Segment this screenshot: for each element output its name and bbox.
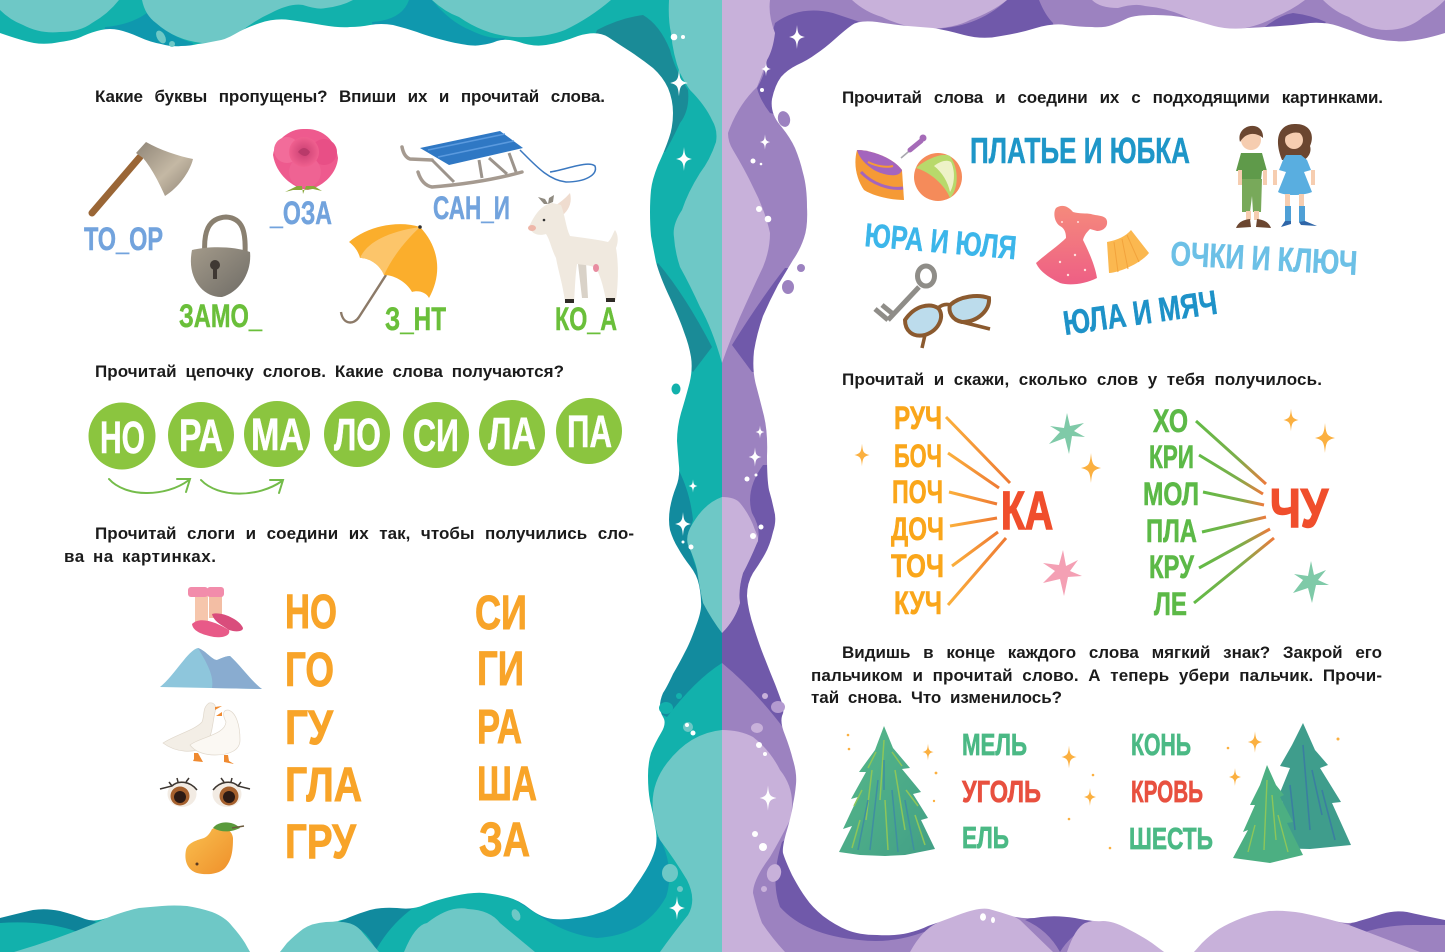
icon: glasses [905, 296, 990, 348]
word fan: чу: КРУ [1149, 549, 1195, 585]
word fan: ка: ДОЧ [891, 511, 944, 547]
icon: fir tree left [839, 726, 935, 856]
heading: what letters are missing: Какие буквы пропущены? Впиши их и прочитай слова. [95, 87, 605, 106]
heading: join syllables: ва на картинках. [64, 547, 216, 566]
icon: axe [92, 142, 193, 213]
word fan: чу: ПЛА [1146, 513, 1197, 549]
decorative sparkles around words [847, 731, 1340, 849]
syllables column 2: ЗА [479, 814, 530, 867]
icon: spinning top [855, 134, 926, 200]
icon: goat [528, 193, 618, 303]
word fan: чу: МОЛ [1143, 476, 1199, 512]
syllables column 2: РА [477, 701, 522, 754]
icon: mountains [160, 648, 262, 689]
word fan: ка: ТОЧ [891, 548, 944, 584]
icon: geese [163, 703, 240, 764]
label: axe word: ТО_ОР [84, 221, 163, 257]
words column: конь кровь шесть: ШЕСТЬ [1129, 821, 1213, 856]
label: lock word: ЗАМО_ [179, 298, 263, 334]
chain of green syllable circles: ЛА [488, 408, 536, 459]
syllables column 2: СИ [475, 587, 527, 640]
paragraph: soft sign task: пальчиком и прочитай слово. А теперь убери пальчик. Прочи- [811, 666, 1382, 685]
label: glasses and key: ОЧКИ И КЛЮЧ [1170, 235, 1358, 283]
chain of green syllable circles: ПА [567, 406, 612, 457]
icon: sled [402, 131, 595, 187]
panel: left page teal frame [0, 0, 722, 952]
word fan: ка [891, 400, 1053, 621]
word fan: чу: КРИ [1149, 439, 1194, 475]
paragraph: soft sign task: тай снова. Что изменилось? [811, 688, 1062, 707]
word fan: чу: ЛЕ [1154, 586, 1187, 622]
word fan: чу [1143, 403, 1329, 622]
word fan: чу: ХО [1153, 403, 1188, 439]
paragraph: soft sign task: Видишь в конце каждого слова мягкий знак? Закрой его [842, 643, 1382, 662]
chain of green syllable circles: СИ [413, 410, 459, 461]
chain of green syllable circles [88, 398, 622, 470]
paragraph: soft sign task [811, 643, 1382, 707]
heading: join syllables: Прочитай слоги и соедини их так, чтобы получились сло- [95, 524, 634, 543]
chain of green syllable circles: РА [179, 410, 223, 461]
word fan: ка: БОЧ [894, 438, 942, 474]
arrow: first syllable link [109, 479, 190, 493]
icon: umbrella [341, 224, 437, 322]
heading: read syllable chain: Прочитай цепочку слогов. Какие слова получаются? [95, 362, 564, 381]
word fan: ка: ПОЧ [892, 474, 943, 510]
label: umbrella word: З_НТ [385, 301, 446, 337]
syllables column 1: ГЛА [285, 759, 362, 812]
word fan: ка: РУЧ [894, 400, 942, 436]
words column: мель уголь ель: МЕЛЬ [962, 727, 1027, 762]
words column: мель уголь ель: ЕЛЬ [962, 820, 1009, 855]
word fan: чу: ЧУ [1270, 477, 1329, 539]
label: rose word: _ОЗА [269, 195, 332, 231]
words column: конь кровь шесть: КОНЬ [1131, 727, 1191, 762]
words column: мель уголь ель: УГОЛЬ [962, 774, 1041, 809]
sparkles and bubbles: left frame [154, 29, 697, 922]
arrow: second syllable link [201, 480, 283, 494]
decorative stars around word fans [854, 409, 1335, 603]
syllables column 1: ГРУ [285, 816, 357, 869]
syllables column 2: ГИ [477, 643, 524, 696]
word fan: ка: КУЧ [894, 585, 942, 621]
label: dress and skirt: ПЛАТЬЕ И ЮБКА [970, 130, 1190, 171]
chain of green syllable circles: МА [251, 409, 304, 460]
icon: pink dress [1036, 206, 1107, 284]
icon: orange skirt [1107, 230, 1149, 273]
label: goat word: КО_А [555, 301, 617, 337]
label: top and ball: ЮЛА И МЯЧ [1061, 284, 1220, 343]
heading: join syllables [64, 524, 634, 566]
icon: eyes [160, 778, 250, 807]
syllables column 2: ША [477, 758, 537, 811]
syllables column 1: ГО [285, 644, 334, 697]
words column: мель уголь ель [962, 727, 1041, 855]
words column: конь кровь шесть [1129, 727, 1213, 856]
words column: конь кровь шесть: КРОВЬ [1131, 774, 1203, 809]
syllables column 1 [285, 586, 362, 869]
heading: read and count: Прочитай и скажи, сколько слов у тебя получилось. [842, 370, 1322, 389]
panel: right page purple frame [722, 0, 1445, 952]
syllables column 1: ГУ [285, 702, 334, 755]
icon: key [875, 266, 934, 320]
chain of green syllable circles: ЛО [334, 409, 381, 460]
word fan: ка: КА [1001, 481, 1053, 541]
heading: read and connect: Прочитай слова и соедини их с подходящими картинками. [842, 88, 1383, 107]
syllables column 2 [475, 587, 537, 867]
icon: rose [273, 129, 338, 194]
icon: slippers with socks [188, 587, 243, 637]
icon: fir trees right [1233, 723, 1351, 863]
sparkles and bubbles: right frame [744, 25, 995, 923]
icon: padlock [191, 217, 250, 297]
label: sled word: САН_И [433, 190, 510, 226]
label: yura and yulya: ЮРА И ЮЛЯ [863, 216, 1018, 266]
icon: boy and girl [1236, 124, 1317, 228]
icon: ball [914, 153, 962, 201]
icon: pear [185, 822, 244, 874]
syllables column 1: НО [285, 586, 337, 639]
chain of green syllable circles: НО [100, 412, 145, 463]
